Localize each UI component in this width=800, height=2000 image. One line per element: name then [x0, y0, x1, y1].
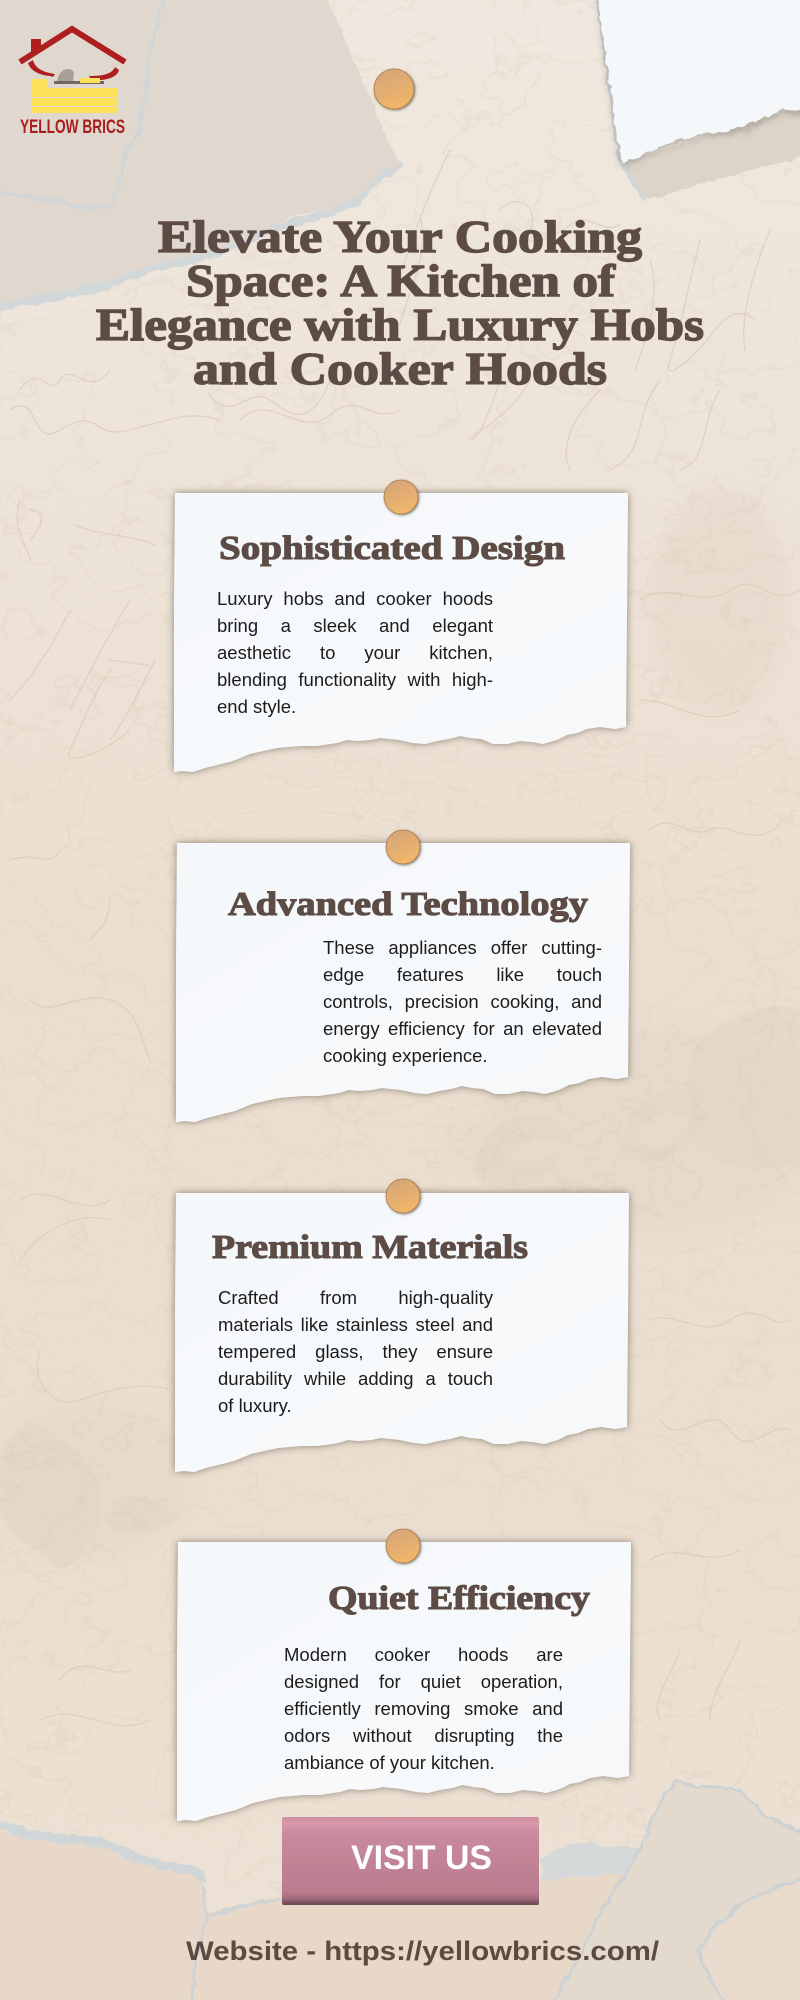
- body text: of luxury.: [218, 1395, 292, 1416]
- logo: Yellow Brics: [20, 29, 125, 138]
- title: Space: A Kitchen of: [186, 256, 616, 306]
- body text: cooking experience.: [323, 1045, 488, 1066]
- body text: bring a sleek and elegant: [217, 615, 493, 636]
- body text: controls, precision cooking, and: [323, 991, 602, 1012]
- panel: Advanced Technology: [170, 829, 636, 1128]
- heading: Quiet Efficiency: [328, 1580, 590, 1617]
- body text: blending functionality with high-: [217, 669, 493, 690]
- call to action button: VISIT US: [351, 1839, 492, 1877]
- body text: materials like stainless steel and: [218, 1314, 493, 1335]
- body text: durability while adding a touch: [218, 1368, 493, 1389]
- body text: edge features like touch: [323, 964, 602, 985]
- heading: Advanced Technology: [228, 886, 588, 923]
- body text: Modern cooker hoods are: [284, 1644, 563, 1665]
- icon: pin: [386, 1529, 420, 1563]
- panel: bottom torn papers: [0, 1780, 800, 2000]
- handwriting texture: [10, 150, 800, 1726]
- panel: Quiet Efficiency: [171, 1528, 636, 1826]
- title: Elegance with Luxury Hobs: [96, 300, 704, 350]
- torn paper note: [176, 843, 630, 1122]
- call to action button: [282, 1817, 539, 1905]
- body text: tempered glass, they ensure: [218, 1341, 493, 1362]
- panel: Sophisticated Design: [168, 479, 634, 778]
- panel: top-left torn paper: [0, 0, 401, 308]
- website link: Website - https://yellowbrics.com/: [186, 1936, 660, 1966]
- torn paper note: [175, 1193, 629, 1472]
- body text: These appliances offer cutting-: [323, 937, 602, 958]
- icon: pin: [384, 480, 418, 514]
- heading: Premium Materials: [212, 1229, 528, 1266]
- body text: odors without disrupting the: [284, 1725, 563, 1746]
- body text: [218, 1287, 493, 1416]
- panel: Premium Materials: [169, 1178, 634, 1478]
- body text: Crafted from high-quality: [218, 1287, 493, 1308]
- body text: ambiance of your kitchen.: [284, 1752, 495, 1773]
- body text: [323, 937, 602, 1066]
- body text: designed for quiet operation,: [284, 1671, 563, 1692]
- title: and Cooker Hoods: [193, 344, 607, 394]
- title: [96, 212, 704, 394]
- body text: aesthetic to your kitchen,: [217, 642, 493, 663]
- icon: pin: [386, 1179, 420, 1213]
- body text: energy efficiency for an elevated: [323, 1018, 602, 1039]
- torn paper note: [177, 1542, 631, 1821]
- logo: Yellow Brics: YELLOW BRICS: [20, 117, 125, 138]
- body text: [217, 588, 493, 717]
- title: Elevate Your Cooking: [158, 212, 643, 262]
- heading: Sophisticated Design: [219, 530, 565, 567]
- icon: pin: [386, 830, 420, 864]
- body text: efficiently removing smoke and: [284, 1698, 563, 1719]
- body text: end style.: [217, 696, 296, 717]
- icon: top pin: [374, 69, 414, 109]
- body text: Luxury hobs and cooker hoods: [217, 588, 493, 609]
- panel: top-right torn paper: [597, 0, 800, 201]
- body text: [284, 1644, 563, 1773]
- torn paper note: [174, 493, 628, 772]
